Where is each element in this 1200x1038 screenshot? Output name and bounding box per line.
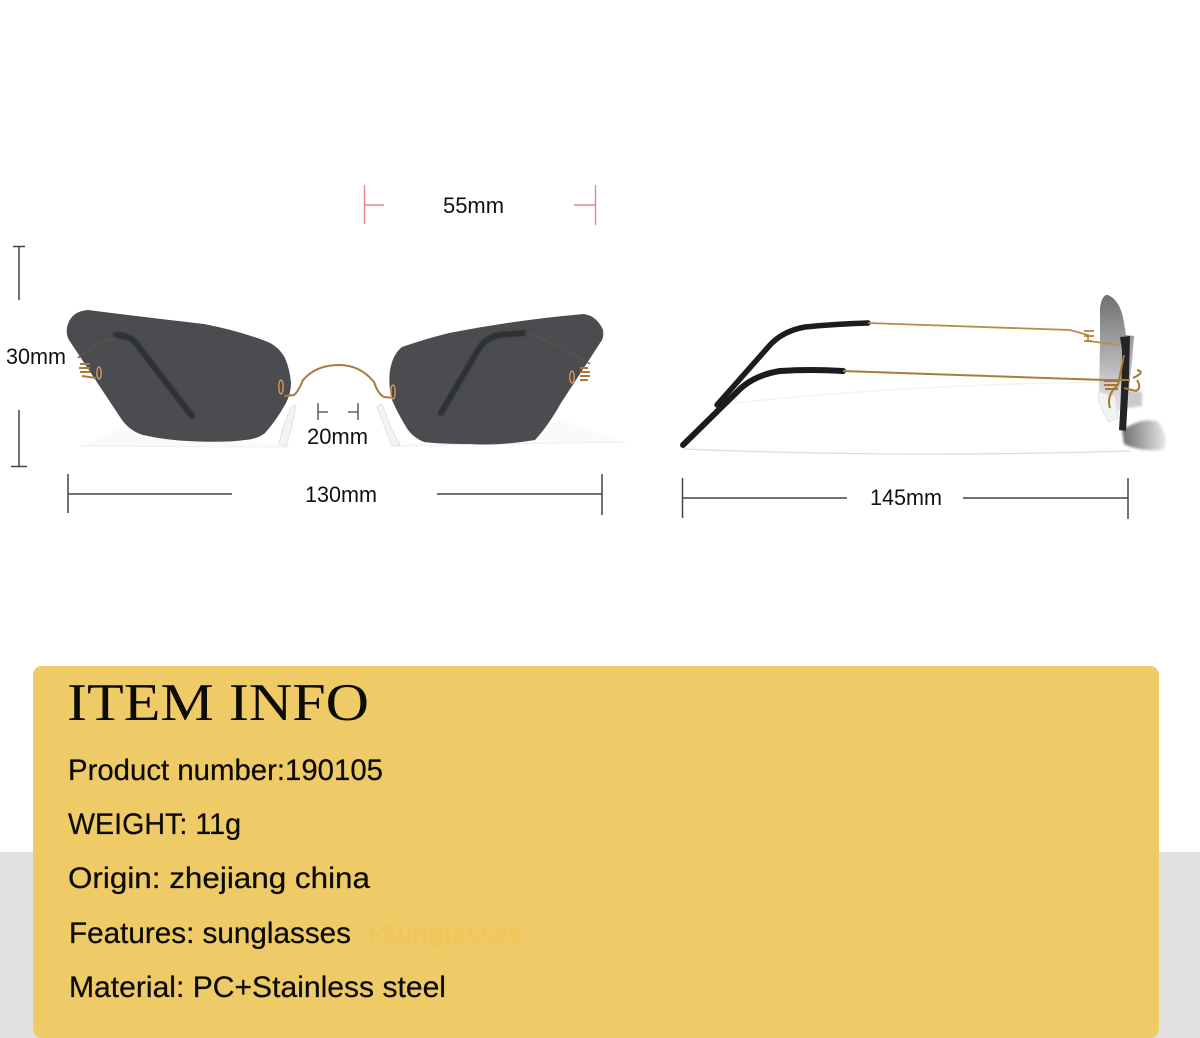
dimension: 20mm bridge [307, 403, 368, 449]
side view of sunglasses [683, 295, 1166, 454]
dimension: 145mm temple length: 145mm [870, 485, 942, 510]
gold temple wires [868, 323, 1120, 345]
front view of sunglasses [67, 310, 625, 447]
grey background band [0, 852, 1200, 1038]
weight: WEIGHT: 11g [68, 808, 241, 841]
upper temple tip [717, 323, 868, 405]
dimension: 55mm lens width: 55mm [443, 193, 504, 218]
upper hinge [1084, 331, 1094, 341]
origin: Origin: zhejiang china [68, 862, 371, 895]
black front rim [1119, 336, 1130, 431]
lens edge-on [1099, 295, 1134, 422]
temple wires [78, 333, 590, 364]
right temple seen through lens [441, 333, 524, 413]
dimension: 130mm frame width: 130mm [305, 482, 377, 507]
right lens [389, 314, 603, 444]
heading: ITEM INFO [67, 674, 369, 732]
material: Material: PC+Stainless steel [69, 971, 446, 1004]
dimension: 145mm temple length [682, 478, 1128, 519]
dimension: 20mm bridge: 20mm [307, 424, 368, 449]
reflection on surface [80, 420, 625, 447]
bridge [284, 365, 394, 398]
features: Features: sunglasses [69, 917, 351, 950]
lower temple tip [683, 370, 843, 445]
faint ghost text: +Sunglasses [365, 919, 523, 949]
nose pad [1098, 392, 1118, 422]
dimension: 30mm lens height [6, 246, 66, 466]
left lens [67, 310, 291, 442]
dimension: 30mm lens height: 30mm [6, 344, 66, 369]
spring hinges [79, 364, 96, 378]
dimension: 130mm frame width [68, 474, 602, 515]
nose pads [279, 404, 400, 446]
left temple seen through lens [116, 335, 192, 416]
side shadow [1122, 420, 1166, 450]
panel: item info [33, 666, 1159, 1038]
floor reflection [683, 449, 1130, 454]
product number: Product number:190105 [68, 754, 383, 787]
lens hinges [97, 367, 574, 399]
lower hinge [1104, 355, 1141, 408]
dimension: 55mm lens width [364, 185, 596, 225]
